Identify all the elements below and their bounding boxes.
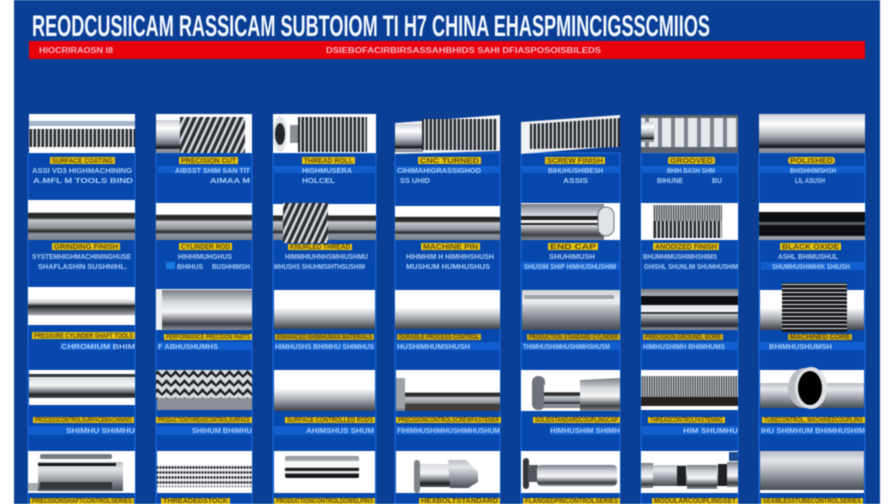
card r4c6 [641, 370, 738, 435]
card r2c4 [395, 206, 500, 271]
card r1c3 [273, 114, 376, 185]
card r4c5 [521, 370, 620, 435]
card r3c6: PRECISION GROUND, BORE [645, 334, 721, 341]
card r2c6: BHUMHIMUSHIMHSHIMS [643, 252, 717, 261]
card r5c6 [641, 451, 738, 504]
card r4c6: THREADCONTROLFASTENING [650, 417, 723, 424]
card r1c6: BIHUNE [657, 176, 683, 185]
card r1c2: PRECISION CUT [181, 158, 237, 165]
card r2c5: SHUHIMUSH [549, 252, 595, 261]
card r3c2 [156, 289, 252, 351]
card r3c7 [760, 283, 865, 351]
card r1c5 [521, 115, 620, 185]
card r5c1 [28, 451, 135, 504]
card r3c2: F ABHUSHUMHS [158, 342, 218, 351]
card r1c5: BIHUHUSHIBESH [548, 166, 603, 175]
card r1c2: AIBSST SHIM SAN TIT [175, 166, 250, 175]
card r3c4: HUSHIMHUMSHUSH [397, 342, 470, 351]
card r3c1: CHROMIUM BHIM [61, 342, 135, 351]
card r4c5: HIMHUSHIM SHIMH [550, 426, 620, 435]
card r2c3: MHUSHS SHUHMSIHTHSUSHIM [274, 262, 365, 271]
card r2c4: HIHMHIM H HIMHIHSHUSH [406, 252, 494, 261]
row 5 cards [28, 451, 864, 504]
card r4c3: AHIMSHUS SHUM [306, 426, 374, 435]
card r1c3: THREAD ROLL [304, 158, 354, 165]
card r3c5 [522, 290, 620, 351]
card r4c4: PRECISIONCONTROLSCREWFASTENER [398, 417, 499, 424]
card r3c5: THIMHUSHIMHUSHIMHSHUSM [523, 342, 610, 351]
card r2c2: BUSHHIMSH [212, 262, 250, 271]
card r4c4: FIHIMHUSHIMHUSHIMHUSHUM [397, 426, 500, 435]
card r3c4: DURABLE PROCESS CONTROL [399, 334, 480, 341]
card r3c7: MACHINED CORE [790, 334, 850, 341]
card r4c3: SURFACE CONTROLLED RODS [287, 417, 373, 424]
card r3c6 [641, 289, 738, 351]
card r4c7 [760, 367, 865, 435]
card r3c3: HIMHUSHS BHIMHU SHIMHUS [275, 342, 374, 351]
card r3c2: PERFORMANCE PRECISION PARTS [166, 334, 250, 341]
card r5c5 [521, 451, 620, 504]
card r5c7 [760, 451, 864, 504]
card r4c7: TUBECONTROL, MACHINEDCOUPLING [764, 417, 863, 424]
card r3c7: BHIMHUSHUMSH [769, 342, 832, 351]
card r2c5 [521, 203, 620, 271]
card r2c3 [273, 203, 376, 271]
card r1c4: SS UHID [400, 176, 431, 185]
card r2c2 [156, 203, 252, 271]
card r1c7: BHISHHIMSHSH [790, 166, 836, 175]
card r5c3 [274, 451, 375, 504]
card r3c1: PRESSURE CYLINDER SHAFT TOOLS [34, 333, 133, 340]
card r4c1: PROCESSCONTROLSURFACEMACHINING [35, 417, 132, 424]
card r1c1: A.MFL M TOOLS BIND [33, 176, 134, 185]
card r1c5: SCREW FINISH [547, 158, 603, 165]
red subtitle banner [29, 41, 865, 59]
card r4c1: SHIMHU SHIMHU [66, 426, 135, 435]
card r1c1 [29, 114, 135, 185]
card r1c4: CIHIMAHIGRASSIGHOD [397, 166, 482, 175]
card r3c4 [395, 290, 500, 351]
row 4 cards [29, 367, 865, 435]
card r1c7: POLISHED [790, 158, 833, 165]
card r1c7: LIL ASUSH [795, 176, 825, 185]
card r4c6: HIM SHUMHU [683, 426, 738, 435]
card r2c4: MUSHUM HUMHUSHUS [406, 262, 490, 271]
card r1c3: HIGHMUSERA [302, 166, 353, 175]
card r1c5: ASSIS [563, 176, 588, 185]
card r1c4 [395, 115, 500, 185]
card r2c6: ANODIZED FINISH [655, 244, 717, 251]
card r3c6: HIMHUSHIMH BHIMHUMS [643, 342, 725, 351]
column backdrops [28, 153, 865, 504]
card r3c1 [28, 287, 135, 351]
card r4c2: PRODUCTIONTHREADCONTROLSURFACE [158, 417, 250, 424]
card r3c3 [274, 290, 375, 351]
card r5c4 [396, 451, 500, 504]
card r2c1: SYSTEMHIGHMACHININGHUSE [32, 252, 131, 261]
card r3c3: ENHANCED BHIMHUMAN MATERIALS [277, 334, 372, 341]
card r2c2: CYLINDER ROD [181, 244, 230, 251]
card r1c1: ASSI VD3 HIGHMACHINING [32, 166, 132, 175]
card r2c4: MACHINE PIN [423, 244, 478, 251]
card r2c5: SHUSIM SHIP HIMHUSHUSHIM [524, 262, 616, 271]
card r4c5: SOLIDSTANDARDCOUPLINGCAP [535, 417, 618, 424]
row 2 cards [28, 200, 865, 271]
card r1c6 [641, 115, 738, 185]
card r4c2 [156, 370, 252, 435]
card r1c4: CNC TURNED [420, 158, 479, 165]
row 1 cards [29, 114, 865, 185]
card r1c2 [156, 114, 252, 185]
card r2c3: HIMMHIUHNHSMHIUSHMU [285, 252, 368, 261]
card r1c2: AIMAA M [210, 176, 250, 185]
card r2c6: GHISHL SHUNLIM SHUMHUSHIM [644, 262, 738, 271]
card r2c7: ASHL BHIMUSHUL [778, 252, 838, 261]
card r2c3: KNURLED THREAD [290, 244, 350, 251]
card r4c3 [274, 370, 375, 435]
card r2c1: GRINDING FINISH [54, 244, 118, 251]
card r1c6: BHIH BASH SHM [667, 166, 715, 175]
card r2c1 [28, 200, 135, 271]
card r3c5: PRODUCTION STANDARD CYLINDER [529, 334, 618, 341]
card r2c7: SHUMHUSHIMHIK SHIUSH [772, 262, 850, 271]
card r1c7 [759, 114, 865, 185]
card r4c7: IHU SHIMHUM BHIMHUSHIM [761, 426, 865, 435]
card r1c3: HOLCEL [302, 176, 335, 185]
red subtitle banner: HIOCRIRAOSN I8 [39, 46, 114, 55]
card r2c2: BHIHUS [177, 262, 203, 271]
card r4c4 [396, 370, 501, 435]
card r1c6: GROOVED [670, 158, 713, 165]
card r2c7: BLACK OXIDE [782, 244, 839, 251]
card r2c6 [641, 203, 738, 271]
red subtitle banner: DSIEBOFACIRBIRSASSAHBHIDS SAHI DFIASPOSOISBILEDS [326, 46, 602, 55]
card r2c1: SHAFLASHIN SUSHNIHL. [38, 262, 127, 271]
card r2c2: HIHHIMUHGHUS [178, 252, 232, 261]
card r2c7 [759, 203, 865, 271]
card r1c6: BU [712, 176, 722, 185]
card r1c1: SURFACE COATING [52, 158, 113, 165]
row 3 cards [28, 283, 865, 351]
card r4c2: SHIHUM BHIMHU [192, 426, 252, 435]
card r5c2 [157, 451, 252, 504]
card r2c5: END CAP [550, 244, 596, 251]
card r4c1 [29, 370, 135, 435]
